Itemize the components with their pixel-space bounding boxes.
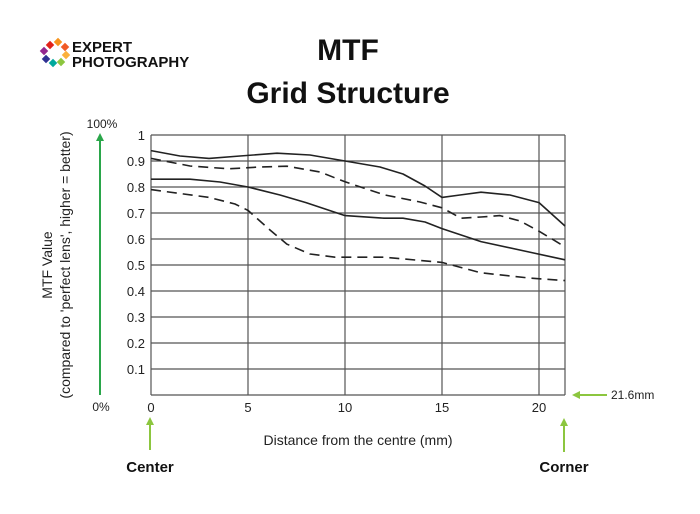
logo text: EXPERT	[72, 39, 132, 56]
x axis labels: 15	[435, 400, 449, 415]
title: Grid Structure	[246, 77, 450, 110]
y axis labels	[127, 128, 145, 377]
arrow: 0% to 100%: 0%	[92, 400, 110, 414]
arrow: center: Center	[126, 459, 174, 476]
y axis labels: 0.1	[127, 362, 145, 377]
chart grid	[151, 135, 565, 395]
x axis labels: 0	[147, 400, 155, 415]
arrow: 21.6mm	[572, 388, 654, 402]
y axis labels: 0.7	[127, 206, 145, 221]
y axis labels: 0.6	[127, 232, 145, 247]
title: MTF	[317, 34, 379, 67]
arrow: center	[126, 417, 174, 476]
y axis labels: 0.9	[127, 154, 145, 169]
arrow: 0% to 100%: 100%	[87, 117, 118, 131]
x axis labels	[147, 400, 546, 415]
x axis labels: 20	[532, 400, 546, 415]
arrow: corner: Corner	[539, 459, 589, 476]
y axis labels: 0.3	[127, 310, 145, 325]
y axis title: MTF Value	[39, 231, 55, 299]
y axis labels: 1	[138, 128, 145, 143]
x axis labels: 5	[244, 400, 252, 415]
y axis labels: 0.2	[127, 336, 145, 351]
x axis labels: 10	[338, 400, 352, 415]
logo	[40, 38, 189, 71]
y axis title: (compared to 'perfect lens', higher = better)	[57, 131, 73, 399]
arrow: 21.6mm: 21.6mm	[611, 388, 654, 402]
y axis title	[39, 131, 73, 399]
y axis labels: 0.4	[127, 284, 145, 299]
y axis labels: 0.5	[127, 258, 145, 273]
arrow: corner	[539, 418, 589, 476]
y axis labels: 0.8	[127, 180, 145, 195]
icon: logo ring	[40, 38, 70, 67]
MTF curves	[151, 151, 565, 281]
arrow: 0% to 100%	[87, 117, 118, 414]
title	[246, 34, 450, 110]
x axis title: Distance from the centre (mm)	[263, 432, 453, 448]
logo: PHOTOGRAPHY	[72, 54, 189, 71]
